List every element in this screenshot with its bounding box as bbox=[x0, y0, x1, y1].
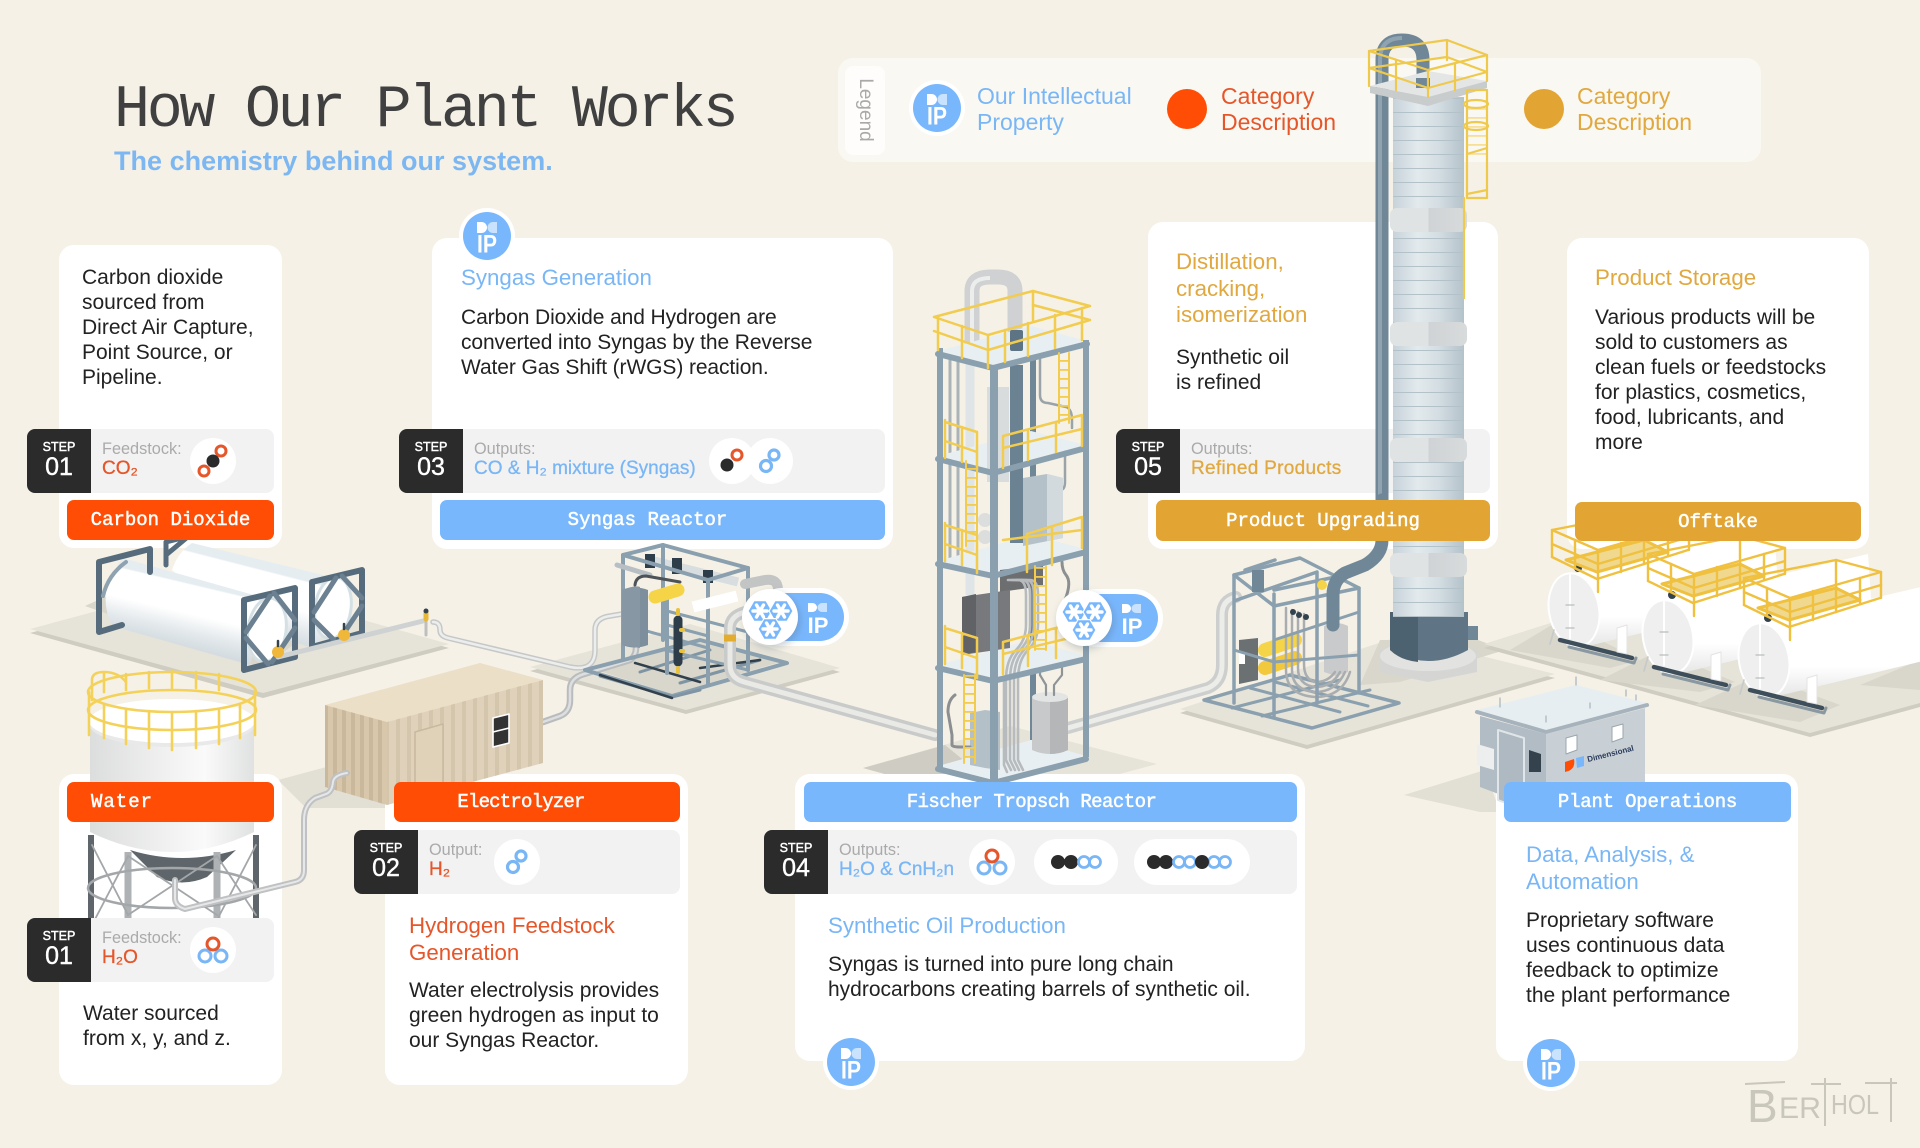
legend icon: IP: IP bbox=[927, 102, 947, 130]
carbon dioxide description: Direct Air Capture, bbox=[82, 316, 254, 339]
hydrogen description: green hydrogen as input to bbox=[409, 1004, 659, 1027]
legend tab bbox=[845, 66, 885, 155]
callout: reactor IP badge: IP bbox=[808, 613, 828, 638]
syngas heading: Syngas Generation bbox=[461, 265, 652, 290]
control box bbox=[1477, 677, 1647, 812]
product storage description: more bbox=[1595, 431, 1643, 454]
hydrogen heading: Hydrogen Feedstock bbox=[409, 913, 615, 938]
step number bbox=[764, 830, 828, 894]
panel: product upgrading bbox=[1148, 222, 1498, 549]
step number: STEP bbox=[43, 929, 75, 943]
syngas description: converted into Syngas by the Reverse bbox=[461, 331, 812, 354]
hydrogen description bbox=[409, 979, 659, 1052]
step number: 01 bbox=[45, 942, 73, 970]
step number: STEP bbox=[415, 440, 447, 454]
icon: CO2 molecule bbox=[190, 438, 236, 484]
carbon dioxide description: Carbon dioxide bbox=[82, 266, 223, 289]
button: plant operations: Plant Operations bbox=[1558, 791, 1737, 813]
pipe: fischer tropsch to product upgrading bbox=[1068, 597, 1236, 728]
shadow: control box bbox=[1404, 770, 1500, 812]
plant operations description: the plant performance bbox=[1526, 984, 1730, 1007]
button: water bbox=[67, 782, 274, 822]
pipe: electrolyzer to reactor bbox=[543, 648, 636, 722]
panel: offtake bbox=[1567, 238, 1869, 549]
data heading bbox=[1526, 842, 1695, 894]
carbon dioxide tanks bbox=[99, 535, 362, 670]
output value: H₂ bbox=[429, 859, 450, 880]
data heading: Data, Analysis, & bbox=[1526, 842, 1695, 867]
fischer tropsch reactor bbox=[934, 277, 1090, 783]
feedstock value: CO₂ bbox=[102, 458, 138, 479]
signature bbox=[1745, 1078, 1897, 1130]
step 02 output bar bbox=[354, 830, 680, 894]
plant operations description: feedback to optimize bbox=[1526, 959, 1719, 982]
distillation heading: cracking, bbox=[1176, 276, 1265, 301]
step number bbox=[27, 918, 91, 982]
step number: 03 bbox=[417, 453, 445, 481]
icon: H2 molecule bbox=[494, 839, 540, 885]
valves bbox=[272, 608, 428, 658]
synthetic oil heading: Synthetic Oil Production bbox=[828, 913, 1066, 938]
plant operations description: Proprietary software bbox=[1526, 909, 1714, 932]
hydrogen heading bbox=[409, 913, 615, 965]
button: carbon dioxide bbox=[67, 500, 274, 540]
icon: H2 molecule bbox=[751, 438, 793, 484]
panel: plant operations bbox=[1496, 774, 1798, 1061]
step number: STEP bbox=[43, 440, 75, 454]
callout: fischer tropsch IP badge: IP bbox=[1122, 614, 1142, 639]
step number bbox=[354, 830, 418, 894]
control box: Dimensional bbox=[1586, 744, 1635, 764]
button: water: Water bbox=[91, 791, 153, 813]
step number bbox=[399, 429, 463, 493]
step 01 feedstock bar bbox=[27, 918, 274, 982]
step 05 outputs bar bbox=[1116, 429, 1490, 493]
shadow: electrolyzer bbox=[278, 766, 390, 808]
IP badge bbox=[459, 208, 515, 260]
step number: STEP bbox=[370, 841, 402, 855]
synthetic oil description bbox=[828, 953, 1251, 1001]
product storage description: for plastics, cosmetics, bbox=[1595, 381, 1806, 404]
legend label: gold category: Description bbox=[1577, 108, 1692, 134]
step number bbox=[27, 429, 91, 493]
button: offtake bbox=[1575, 502, 1861, 541]
syngas description bbox=[461, 306, 812, 379]
legend label: gold category: Category bbox=[1577, 83, 1670, 109]
icon: CO molecule bbox=[709, 438, 751, 484]
panel: fischer tropsch bbox=[795, 774, 1305, 1061]
storage tanks bbox=[1543, 512, 1920, 713]
distillation heading bbox=[1176, 249, 1307, 327]
product upgrading description: Synthetic oil bbox=[1176, 346, 1289, 369]
IP badge: IP bbox=[477, 230, 497, 258]
icon: H2O molecule bbox=[969, 839, 1015, 885]
title: How Our Plant Works bbox=[114, 77, 735, 145]
button: offtake: Offtake bbox=[1678, 510, 1758, 532]
legend label: intellectual property: Our Intellectual bbox=[977, 83, 1132, 109]
legend label: orange category: Description bbox=[1221, 108, 1336, 134]
button: syngas reactor: Syngas Reactor bbox=[568, 509, 727, 531]
hydrogen heading: Generation bbox=[409, 940, 519, 965]
carbon dioxide description bbox=[82, 266, 254, 389]
button: product upgrading: Product Upgrading bbox=[1226, 510, 1420, 532]
carbon dioxide description: Pipeline. bbox=[82, 366, 163, 389]
distillation heading: isomerization bbox=[1176, 302, 1307, 327]
pipe: valve to reactor bbox=[433, 614, 622, 668]
panel: syngas generation bbox=[432, 238, 893, 549]
legend label: gold category bbox=[1577, 83, 1692, 135]
subtitle: The chemistry behind our system. bbox=[114, 146, 553, 176]
button: electrolyzer: Electrolyzer bbox=[457, 791, 585, 813]
outputs value: CO & H₂ mixture (Syngas) bbox=[474, 458, 696, 479]
feedstock value: H₂O bbox=[102, 947, 138, 968]
pad: fischer tropsch reactor bbox=[863, 726, 1157, 806]
distillation heading: Distillation, bbox=[1176, 249, 1284, 274]
IP badge bbox=[823, 1038, 879, 1090]
outputs value: Refined Products bbox=[1191, 458, 1342, 479]
synthetic oil description: hydrocarbons creating barrels of synthetic oil. bbox=[828, 978, 1251, 1001]
IP badge: IP bbox=[1541, 1058, 1561, 1086]
IP badge: IP bbox=[841, 1056, 861, 1084]
panel: carbon dioxide bbox=[59, 245, 282, 548]
outputs label: Outputs: bbox=[1191, 440, 1253, 458]
button: fischer tropsch reactor bbox=[804, 782, 1297, 822]
product upgrading description bbox=[1176, 346, 1289, 394]
step number: 04 bbox=[782, 854, 810, 882]
product storage description bbox=[1595, 306, 1826, 454]
hydrogen description: our Syngas Reactor. bbox=[409, 1029, 599, 1052]
plant operations description bbox=[1526, 909, 1730, 1007]
step 03 outputs bar bbox=[399, 429, 885, 493]
legend tab: Legend bbox=[855, 78, 876, 142]
icon: long hydrocarbon bbox=[1134, 839, 1250, 885]
button: carbon dioxide: Carbon Dioxide bbox=[91, 509, 250, 531]
legend dot: orange bbox=[1167, 89, 1207, 129]
legend panel bbox=[838, 58, 1761, 162]
outputs label: Outputs: bbox=[474, 440, 536, 458]
water description bbox=[83, 1002, 231, 1050]
feedstock label: Feedstock: bbox=[102, 440, 182, 458]
pad: syngas reactor bbox=[530, 624, 840, 714]
water description: from x, y, and z. bbox=[83, 1027, 231, 1050]
syngas reactor bbox=[585, 545, 787, 698]
legend label: orange category bbox=[1221, 83, 1336, 135]
pad: carbon dioxide tanks bbox=[30, 579, 449, 698]
outputs value: H₂O & CnH₂n bbox=[839, 859, 954, 880]
distillation tower bbox=[1333, 38, 1488, 682]
output label: Output: bbox=[429, 841, 482, 859]
signature: HOL bbox=[1831, 1089, 1879, 1120]
product storage description: Various products will be bbox=[1595, 306, 1815, 329]
callout: reactor IP badge bbox=[740, 588, 849, 652]
callout: fischer tropsch IP badge bbox=[1054, 589, 1163, 652]
button: plant operations bbox=[1504, 782, 1791, 822]
panel: electrolyzer bbox=[385, 774, 688, 1085]
pipe: tanks to valve bbox=[278, 621, 423, 657]
product upgrading unit bbox=[1204, 558, 1399, 728]
panel: water bbox=[59, 774, 282, 1085]
icon: H2O molecule bbox=[190, 927, 236, 973]
pad: product upgrading bbox=[1180, 636, 1555, 749]
button: electrolyzer bbox=[394, 782, 680, 822]
legend dot: gold bbox=[1524, 89, 1564, 129]
legend label: intellectual property bbox=[977, 83, 1132, 135]
button: product upgrading bbox=[1156, 500, 1490, 541]
step number: STEP bbox=[780, 841, 812, 855]
feedstock label: Feedstock: bbox=[102, 929, 182, 947]
water description: Water sourced bbox=[83, 1002, 219, 1025]
product storage description: clean fuels or feedstocks bbox=[1595, 356, 1826, 379]
pad: storage tanks bbox=[1484, 576, 1920, 737]
step number: 01 bbox=[45, 453, 73, 481]
electrolyzer container bbox=[325, 663, 543, 805]
button: fischer tropsch reactor: Fischer Tropsch Reactor bbox=[907, 791, 1156, 813]
step number bbox=[1116, 429, 1180, 493]
syngas description: Carbon Dioxide and Hydrogen are bbox=[461, 306, 777, 329]
product upgrading description: is refined bbox=[1176, 371, 1261, 394]
outputs label: Outputs: bbox=[839, 841, 901, 859]
carbon dioxide description: Point Source, or bbox=[82, 341, 233, 364]
legend label: intellectual property: Property bbox=[977, 108, 1064, 134]
signature: ER bbox=[1779, 1092, 1821, 1125]
legend label: orange category: Category bbox=[1221, 83, 1314, 109]
pipe: reactor to fischer tropsch bbox=[724, 612, 935, 735]
product storage description: sold to customers as bbox=[1595, 331, 1788, 354]
button: syngas reactor bbox=[440, 500, 885, 540]
hydrogen description: Water electrolysis provides bbox=[409, 979, 659, 1002]
product storage heading: Product Storage bbox=[1595, 265, 1756, 290]
step number: 05 bbox=[1134, 453, 1162, 481]
carbon dioxide description: sourced from bbox=[82, 291, 205, 314]
syngas description: Water Gas Shift (rWGS) reaction. bbox=[461, 356, 769, 379]
step number: 02 bbox=[372, 854, 400, 882]
legend icon: IP bbox=[909, 80, 965, 136]
data heading: Automation bbox=[1526, 869, 1639, 894]
step 04 outputs bar bbox=[764, 830, 1297, 894]
IP badge bbox=[1523, 1039, 1579, 1091]
water tank bbox=[88, 671, 347, 925]
step number: STEP bbox=[1132, 440, 1164, 454]
plant operations description: uses continuous data bbox=[1526, 934, 1724, 957]
synthetic oil description: Syngas is turned into pure long chain bbox=[828, 953, 1174, 976]
product storage description: food, lubricants, and bbox=[1595, 406, 1784, 429]
icon: short hydrocarbon bbox=[1034, 839, 1118, 885]
step 01 feedstock bar bbox=[27, 429, 274, 493]
